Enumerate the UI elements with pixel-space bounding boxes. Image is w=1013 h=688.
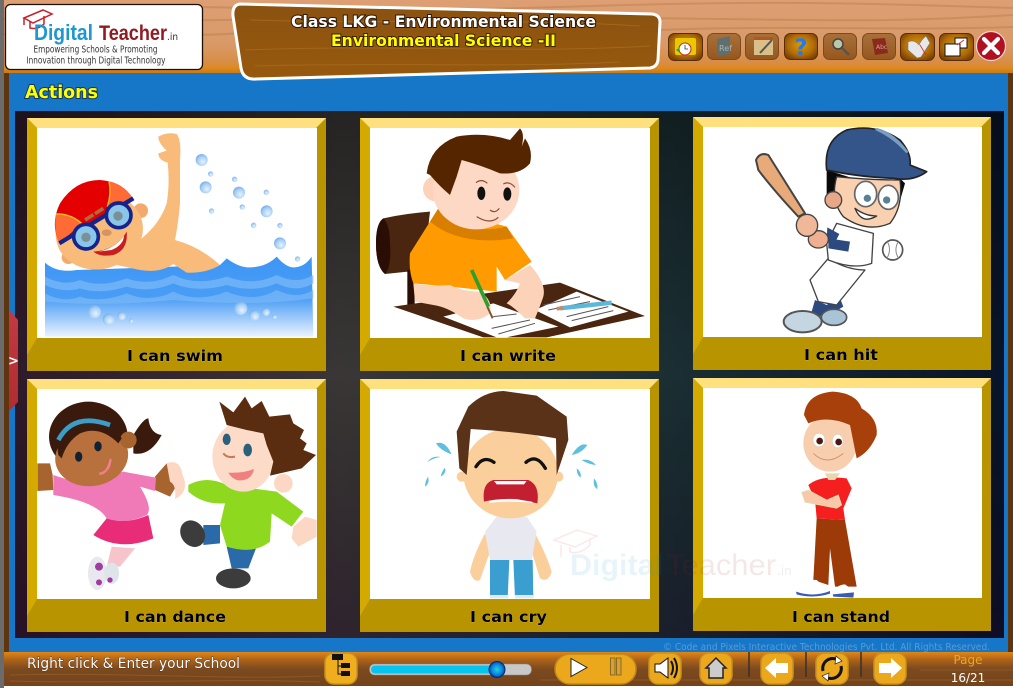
logo tagline line 2: Innovation through Digital Technology xyxy=(26,56,166,66)
dark content panel xyxy=(15,111,1004,638)
separator xyxy=(748,652,750,677)
caption: I can stand xyxy=(792,608,890,626)
logo wordmark Teacher: Teacher xyxy=(99,22,167,45)
icon: help xyxy=(784,34,818,61)
course title: Class LKG - Environmental Science xyxy=(291,12,596,31)
card frame xyxy=(360,379,659,632)
panel: I can swim xyxy=(27,118,326,371)
icon: reference book: Ref xyxy=(719,44,732,53)
bottom wooden control bar xyxy=(4,652,1013,686)
logo tagline line 1: Empowering Schools & Promoting xyxy=(34,44,158,56)
panel: I can write xyxy=(360,118,659,371)
side drawer tab xyxy=(8,310,19,411)
side drawer tab: > xyxy=(8,354,19,369)
watermark: Digital xyxy=(570,549,663,582)
card frame xyxy=(693,378,991,631)
icon: next page xyxy=(874,653,906,684)
section heading: Actions xyxy=(25,82,98,103)
page number: 16/21 xyxy=(951,671,985,685)
icon: home xyxy=(700,653,732,684)
icon: reference book xyxy=(708,34,740,60)
logo mortarboard icon xyxy=(24,10,52,28)
watermark xyxy=(554,530,792,582)
icon: notepad xyxy=(746,34,778,60)
caption: I can hit xyxy=(804,346,878,364)
caption: I can swim xyxy=(127,347,223,365)
icon: sound xyxy=(649,653,681,684)
card frame xyxy=(27,379,326,632)
icon: history clock xyxy=(668,34,702,60)
title plate xyxy=(233,4,660,79)
card frame xyxy=(693,117,991,370)
card frame xyxy=(27,118,326,371)
page label: Page xyxy=(953,653,983,667)
card frame xyxy=(360,118,659,371)
toolbar icons xyxy=(668,32,1006,61)
caption: I can write xyxy=(460,347,556,365)
panel: I can stand xyxy=(693,378,991,631)
illustration: children dancing xyxy=(37,397,317,590)
illustration: swimmer xyxy=(45,133,313,337)
separator xyxy=(860,652,862,677)
icon: magnifier xyxy=(824,34,856,60)
panel: I can dance xyxy=(27,379,326,632)
progress slider xyxy=(370,662,532,678)
watermark: .in xyxy=(777,564,792,578)
icon: replay xyxy=(816,653,848,684)
icon: previous page xyxy=(761,653,793,684)
logo wordmark Digital: Digital xyxy=(34,20,93,45)
icon: window resize xyxy=(940,34,974,60)
top wooden header bar xyxy=(4,0,1013,73)
play and pause control xyxy=(555,654,636,684)
icon: help: ? xyxy=(795,36,807,61)
icon: open book xyxy=(900,34,934,60)
caption: I can cry xyxy=(470,608,547,626)
icon: dictionary: Abc xyxy=(876,44,887,51)
separator xyxy=(805,652,807,677)
logo wordmark suffix: .in xyxy=(167,32,178,43)
watermark: Teacher xyxy=(666,549,776,582)
panel: I can hit xyxy=(693,117,991,370)
illustration: boy with baseball bat xyxy=(756,128,927,332)
illustration: boy standing xyxy=(796,392,877,598)
logo box xyxy=(6,4,202,70)
icon: contents tree xyxy=(325,653,357,684)
subject subtitle: Environmental Science -II xyxy=(331,31,556,50)
illustration: boy crying xyxy=(425,391,598,598)
panel: I can cry xyxy=(360,379,659,632)
icon: close xyxy=(976,32,1006,60)
caption: I can dance xyxy=(124,608,226,626)
illustration: boy writing xyxy=(376,128,645,337)
school name prompt: Right click & Enter your School xyxy=(27,656,240,672)
icon: dictionary xyxy=(862,34,896,60)
